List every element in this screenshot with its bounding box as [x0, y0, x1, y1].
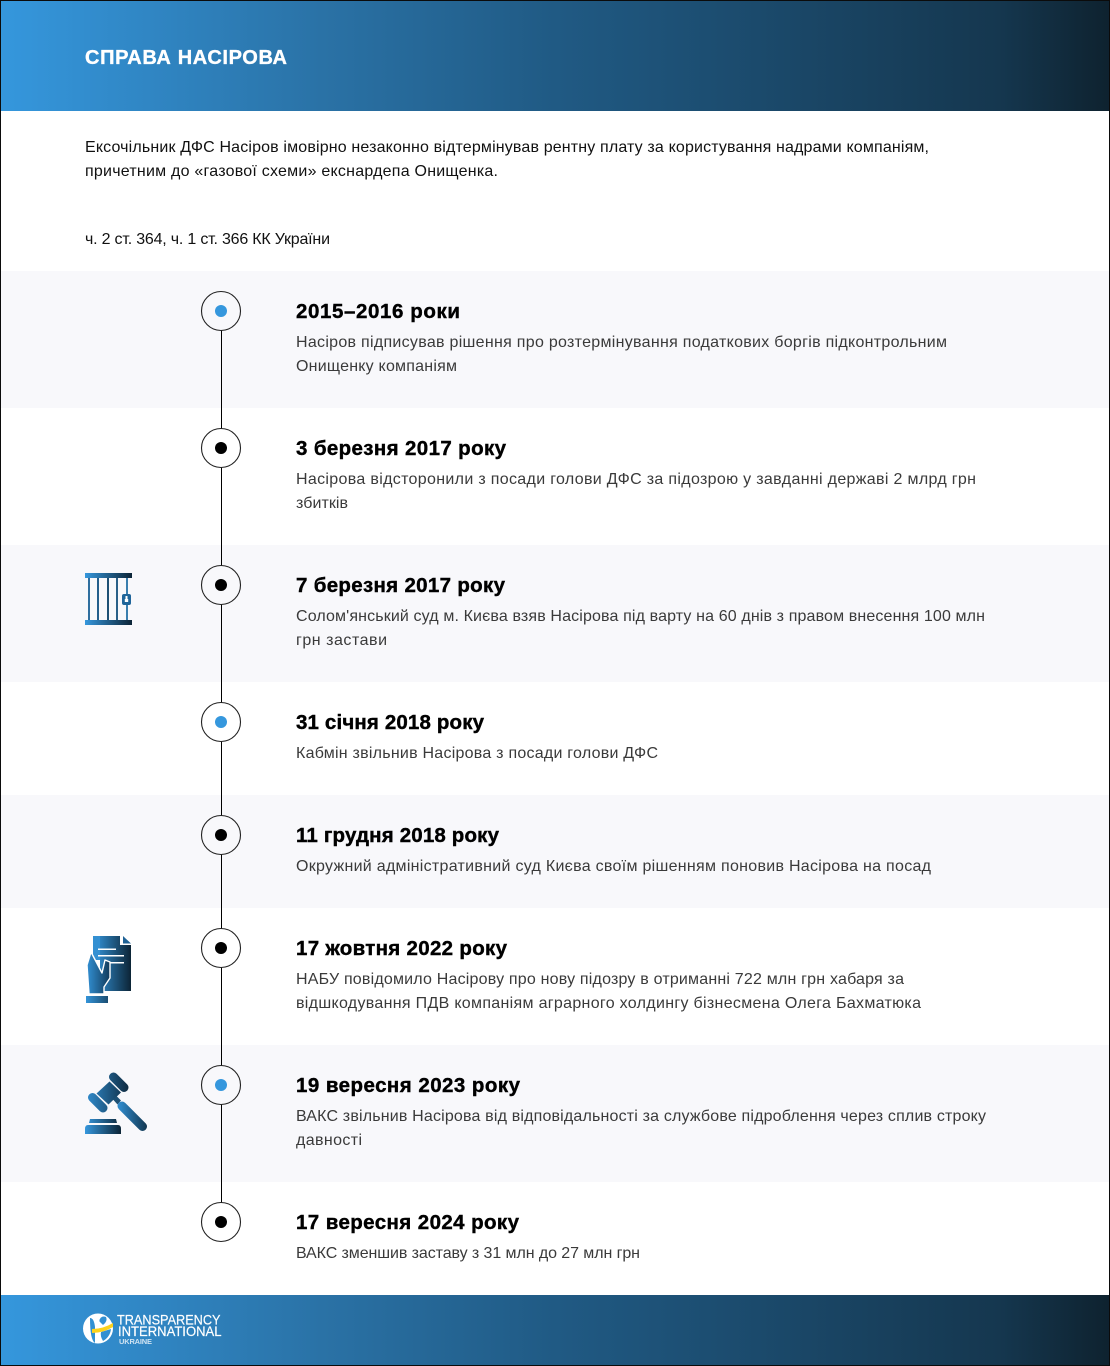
logo: Transparency International Ukraine: [83, 1312, 222, 1346]
event: 19 September 2023: ВАКС звільнив Насірова від відповідальності за службове підроблення через сплив строку: [296, 1108, 986, 1125]
logo: Transparency International Ukraine: TRANSPARENCY: [117, 1312, 221, 1328]
event: 7 March 2017: [202, 566, 985, 649]
event: 3 March 2017: 3 березня 2017 року: [296, 437, 507, 460]
header band: [0, 0, 1110, 111]
event: 7 March 2017: Солом'янський суд м. Києва взяв Насірова під варту на 60 днів з правом внесення 100 млн: [296, 608, 985, 625]
event: 17 October 2022: 17 жовтня 2022 року: [296, 937, 508, 960]
event: 17 October 2022: [202, 928, 921, 1012]
event: 7 March 2017: 7 березня 2017 року: [296, 574, 506, 597]
icon: gavel: [85, 1077, 142, 1134]
event: 2015–2016: [202, 292, 947, 375]
event: 11 December 2018: [202, 816, 932, 875]
event: 17 October 2022: НАБУ повідомило Насірову про нову підозру в отриманні 722 млн грн хабаря за: [296, 971, 904, 988]
event: 2015–2016: Онищенку компаніям: [296, 358, 457, 375]
event: 3 March 2017: [202, 428, 976, 512]
icon: prison bars: [85, 573, 132, 625]
title: СПРАВА НАСІРОВА: [85, 47, 287, 69]
event: 17 September 2024: 17 вересня 2024 року: [296, 1211, 520, 1234]
icon: hand holding document: [86, 936, 131, 1003]
intro text: причетним до «газової схеми» екснардепа Онищенка.: [85, 163, 498, 180]
event: 17 October 2022: відшкодування ПДВ компаніям аграрного холдингу бізнесмена Олега Бахматюка: [296, 995, 921, 1012]
event: 7 March 2017: грн застави: [296, 632, 387, 649]
event: 19 September 2023: давності: [296, 1132, 362, 1149]
intro text: [85, 139, 929, 180]
event: 11 December 2018: Окружний адміністративний суд Києва своїм рішенням поновив Насірова на посад: [296, 858, 932, 875]
event: 2015–2016: 2015–2016 роки: [296, 300, 460, 323]
row backgrounds: [0, 271, 1110, 1182]
event: 17 September 2024: ВАКС зменшив заставу з 31 млн до 27 млн грн: [296, 1245, 640, 1262]
event: 31 January 2018: 31 січня 2018 року: [296, 711, 485, 734]
legal reference: ч. 2 ст. 364, ч. 1 ст. 366 КК України: [85, 231, 330, 248]
event: 3 March 2017: збитків: [296, 495, 348, 512]
event: 17 September 2024: [202, 1202, 640, 1262]
footer band: [0, 1295, 1110, 1365]
logo: Transparency International Ukraine: INTERNATIONAL: [118, 1323, 222, 1339]
logo: Transparency International Ukraine: UKRAINE: [119, 1337, 152, 1346]
event: 31 January 2018: [202, 702, 658, 762]
event: 3 March 2017: Насірова відсторонили з посади голови ДФС за підозрою у завданні державі 2 млрд грн: [296, 471, 976, 488]
timeline line: [221, 311, 222, 1222]
event: 2015–2016: Насіров підписував рішення про розтермінування податкових боргів підконтрольним: [296, 334, 947, 351]
event: 31 January 2018: Кабмін звільнив Насірова з посади голови ДФС: [296, 745, 658, 762]
intro text: Ексочільник ДФС Насіров імовірно незаконно відтермінував рентну плату за користування надрами компаніям,: [85, 139, 929, 156]
event: 19 September 2023: 19 вересня 2023 року: [296, 1074, 521, 1097]
event: 19 September 2023: [202, 1066, 986, 1149]
event: 11 December 2018: 11 грудня 2018 року: [296, 824, 500, 847]
